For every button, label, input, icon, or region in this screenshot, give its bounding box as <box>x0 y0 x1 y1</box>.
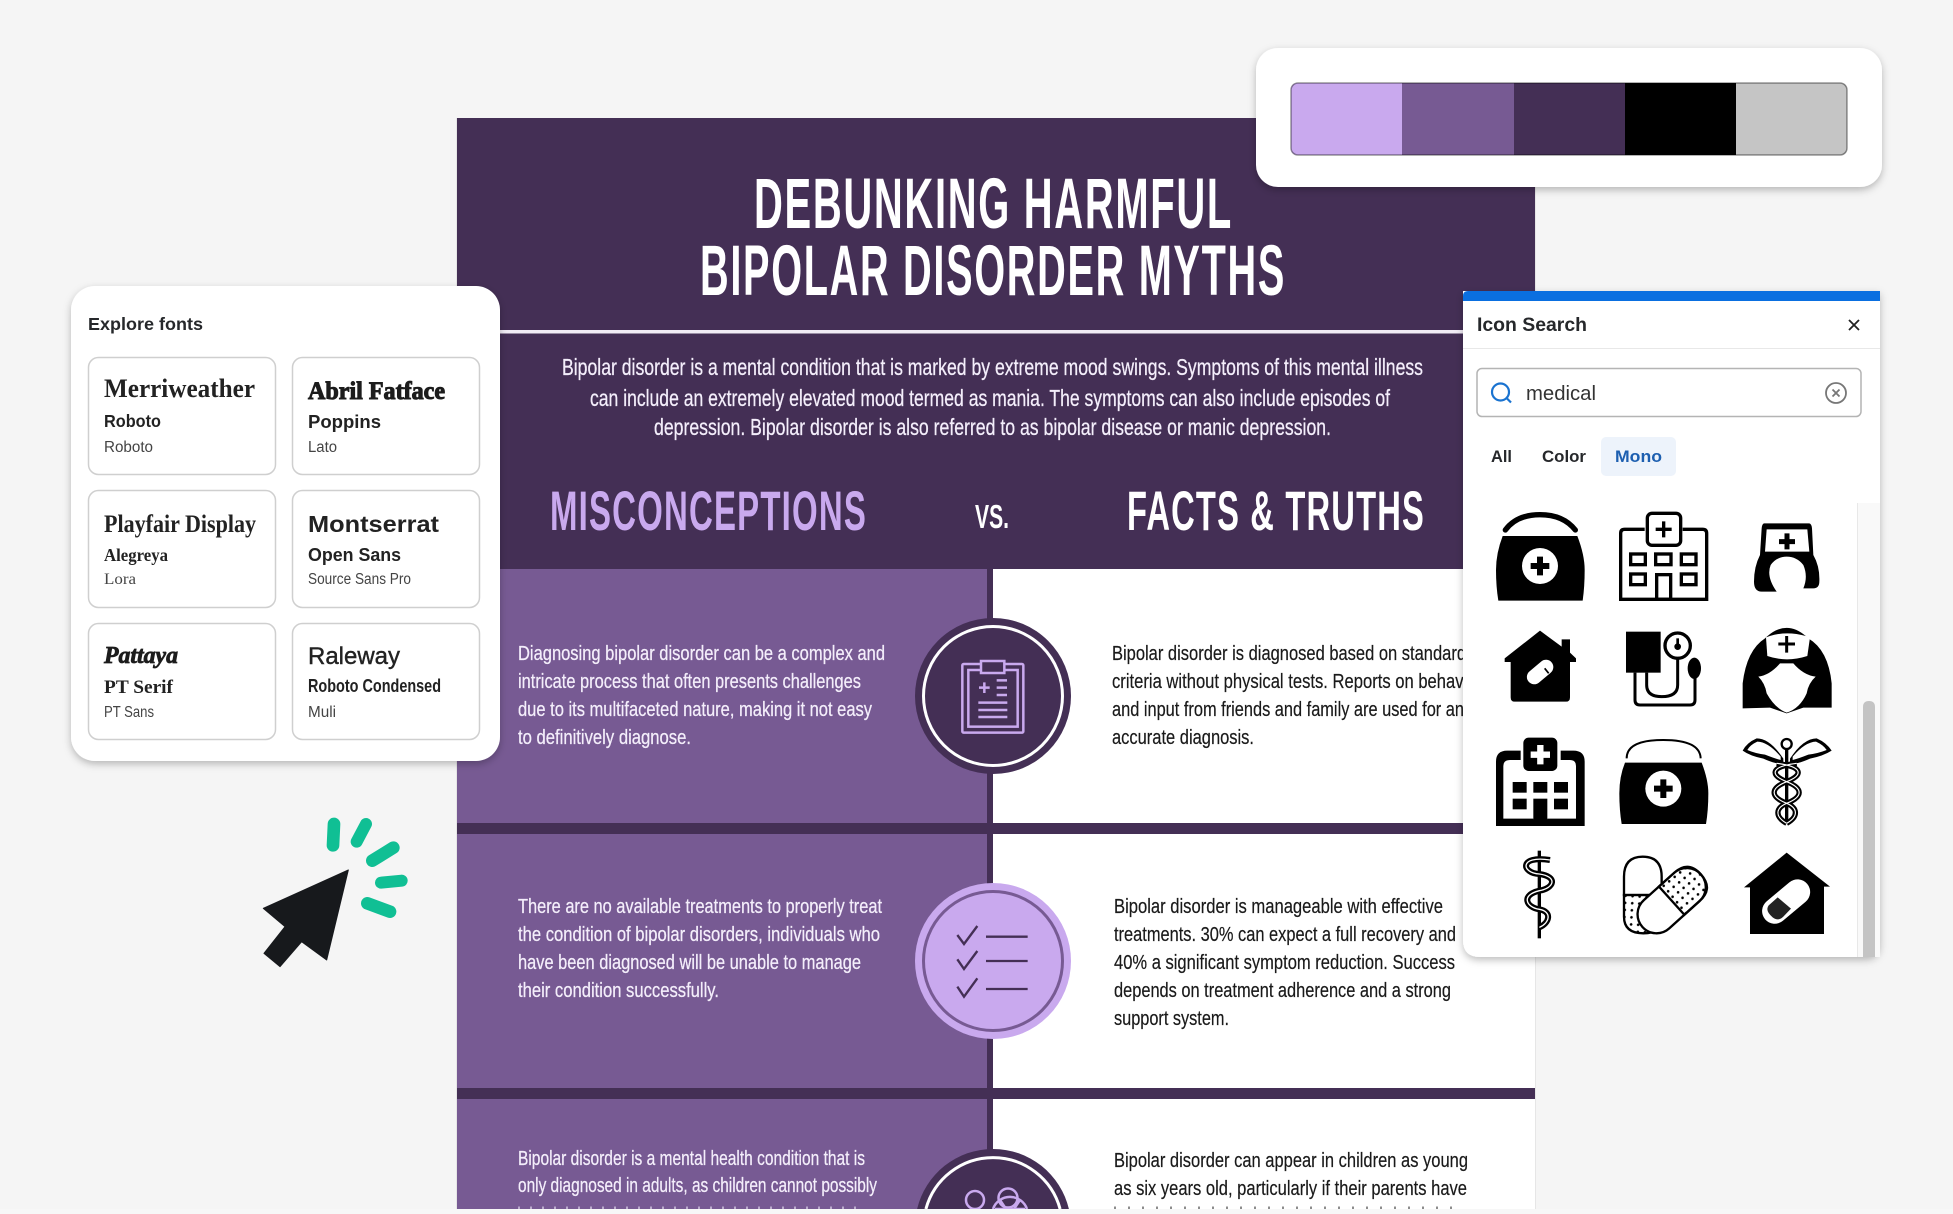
font card 4 <box>292 490 480 608</box>
font card 3 <box>88 490 276 608</box>
myth 1 text: to definitively diagnose. <box>518 726 691 749</box>
filter tabs: All <box>1491 448 1512 466</box>
icon: magnifier <box>1492 384 1511 402</box>
cursor arrow <box>263 870 348 967</box>
icon: medical bag <box>1496 515 1585 601</box>
icon: medical bag thin handle <box>1619 740 1708 824</box>
close button <box>1849 320 1859 330</box>
poster header background <box>457 118 1535 569</box>
font card 4: Open Sans <box>308 545 401 565</box>
icon: clear <box>1826 383 1846 403</box>
icon: hospital outline <box>1621 513 1707 599</box>
myth 2 text: have been diagnosed will be unable to manage <box>518 951 861 974</box>
heading: vs: VS. <box>975 498 1009 535</box>
intro text: depression. Bipolar disorder is also referred to as bipolar disease or manic depression. <box>654 414 1331 440</box>
filter tabs: Mono <box>1615 448 1662 466</box>
row 3 <box>457 1099 1535 1209</box>
font card 6: Muli <box>308 704 336 721</box>
fact 2 text: support system. <box>1114 1007 1229 1030</box>
blue top bar <box>1463 291 1880 301</box>
badge: checklist <box>915 883 1071 1039</box>
fact 2 text: treatments. 30% can expect a full recovery and <box>1114 923 1456 946</box>
fact 1 text <box>1112 642 1482 749</box>
fact 1 text: criteria without physical tests. Reports on behavior <box>1112 670 1482 693</box>
search box <box>1477 368 1861 416</box>
icon: rod of asclepius <box>1526 851 1552 938</box>
icon: people <box>966 1188 1027 1209</box>
colour swatches <box>1291 83 1847 155</box>
font card 1: Roboto <box>104 439 153 456</box>
icon: checklist <box>957 926 1028 997</box>
icon: house with pill <box>1505 631 1576 702</box>
font card 4: Montserrat <box>308 511 439 537</box>
myth 3 text: Bipolar disorder is a mental health condition that is <box>518 1147 865 1170</box>
fact 1 text: accurate diagnosis. <box>1112 726 1254 749</box>
fact 3 text: Bipolar disorder can appear in children as young <box>1114 1149 1468 1172</box>
title: DEBUNKING HARMFUL <box>754 165 1233 244</box>
filter tabs: Color <box>1542 448 1587 466</box>
fact 3 text <box>1114 1149 1468 1200</box>
font card 2: Poppins <box>308 412 381 432</box>
font card 1: Merriweather <box>104 374 255 403</box>
fact 1 text: Bipolar disorder is diagnosed based on standard <box>1112 642 1466 665</box>
badge: people <box>917 1149 1069 1209</box>
panel heading: Icon Search <box>1477 314 1587 336</box>
fact 2 text: Bipolar disorder is manageable with effective <box>1114 895 1443 918</box>
badge: clipboard <box>915 618 1071 774</box>
font card 5: PT Serif <box>104 677 174 698</box>
panel: palette <box>1256 48 1882 187</box>
font card 1 <box>88 358 276 474</box>
icon: house with pill large <box>1744 853 1830 934</box>
icon: clipboard <box>962 661 1023 733</box>
fact 1 text: and input from friends and family are used for an <box>1112 698 1464 721</box>
font card 4: Source Sans Pro <box>308 571 411 588</box>
intro text <box>562 354 1423 440</box>
title <box>700 165 1286 311</box>
heading: misconceptions: MISCONCEPTIONS <box>550 479 867 542</box>
fact 2 text: 40% a significant symptom reduction. Success <box>1114 951 1455 974</box>
font card 3: Playfair Display <box>104 511 256 538</box>
myth 1 text: due to its multifaceted nature, making it not easy <box>518 698 873 721</box>
heading: facts and truths: FACTS & TRUTHS <box>1127 479 1425 542</box>
row 1 <box>457 569 1535 823</box>
myth 2 text: their condition successfully. <box>518 979 719 1002</box>
filter tabs <box>1491 437 1676 476</box>
click sparks <box>333 824 402 912</box>
font card 3: Alegreya <box>104 545 168 565</box>
font card 6: Roboto Condensed <box>308 675 441 696</box>
fact 3 text: as six years old, particularly if their parents have <box>1114 1177 1467 1200</box>
title: BIPOLAR DISORDER MYTHS <box>700 232 1286 311</box>
myth 3 text <box>518 1147 878 1197</box>
heading: Explore fonts <box>88 314 203 334</box>
icon: hospital solid <box>1496 738 1585 826</box>
myth 2 text: There are no available treatments to properly treat <box>518 895 882 918</box>
font card 5: PT Sans <box>104 704 154 721</box>
font card 5: Pattaya <box>103 643 178 669</box>
myth 2 text <box>518 895 882 1002</box>
row 2 <box>457 834 1535 1088</box>
font card 1: Roboto <box>104 411 161 431</box>
icon: nurse <box>1743 628 1832 713</box>
scrollbar <box>1857 503 1880 957</box>
icon: caduceus <box>1743 738 1832 824</box>
font card 5 <box>88 624 276 740</box>
myth 2 text: the condition of bipolar disorders, individuals who <box>518 923 880 946</box>
font card 6 <box>292 624 480 740</box>
font card 2: Lato <box>308 439 337 456</box>
fact 2 text: depends on treatment adherence and a strong <box>1114 979 1451 1002</box>
fact 2 text <box>1114 895 1456 1030</box>
myth 3 text: only diagnosed in adults, as children cannot possibly <box>518 1174 878 1197</box>
panel: explore fonts <box>71 286 500 761</box>
intro text: Bipolar disorder is a mental condition that is marked by extreme mood swings. Symptoms of this mental illness <box>562 354 1423 380</box>
poster <box>456 118 1536 1209</box>
font card 2: Abril Fatface <box>308 378 445 405</box>
font card 3: Lora <box>104 571 136 588</box>
icon: cursor with click sparks <box>263 824 402 967</box>
search box: medical <box>1526 383 1596 405</box>
font card 2 <box>292 358 480 474</box>
icon: blood pressure cuff <box>1626 632 1701 705</box>
font card 6: Raleway <box>308 643 400 670</box>
myth 1 text <box>518 642 885 749</box>
icon: pills <box>1624 857 1714 941</box>
myth 1 text: Diagnosing bipolar disorder can be a complex and <box>518 642 885 665</box>
myth 1 text: intricate process that often presents challenges <box>518 670 861 693</box>
panel: icon search <box>1463 291 1880 957</box>
icon: nurse cap small <box>1754 523 1819 592</box>
intro text: can include an extremely elevated mood termed as mania. The symptoms can also include episodes of <box>590 385 1390 411</box>
